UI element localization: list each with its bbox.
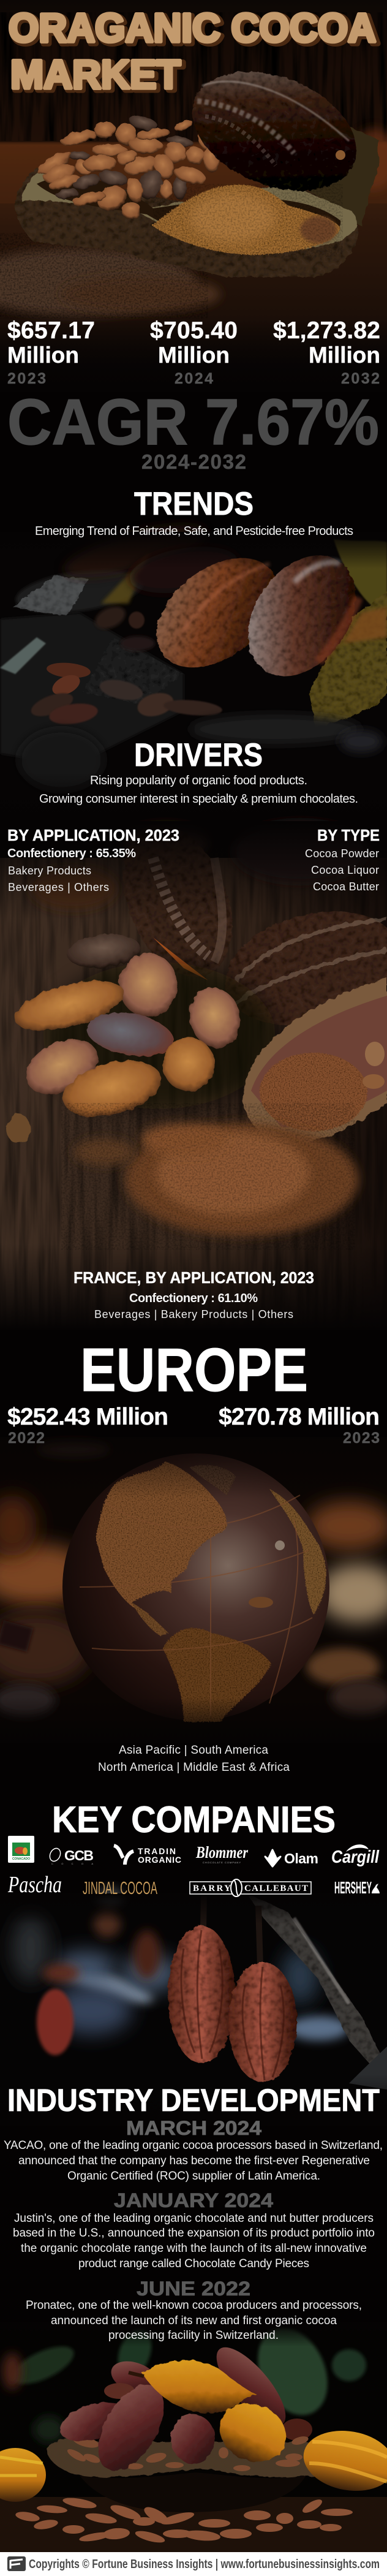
globe grid lines (80, 1495, 312, 1716)
text: other regions: Asia Pacific | South America (119, 1744, 268, 1757)
stat: Europe 2022: $252.43 Million (7, 1404, 168, 1430)
logo: Barry Callebaut: CALLEBAUT (244, 1884, 308, 1893)
stat: 2023 market size: $657.17 (7, 317, 95, 344)
cacao pod (175, 49, 374, 213)
heading: key companies: KEY COMPANIES (52, 1799, 336, 1840)
development: January 2024: the organic chocolate range with the launch of its all-new innovative (21, 2242, 367, 2255)
development: June 2022: JUNE 2022 (137, 2278, 250, 2300)
segmentation: by type: BY TYPE (317, 826, 380, 844)
logo: Barry Callebaut (190, 1879, 311, 1896)
text: trends description: Emerging Trend of Fairtrade, Safe, and Pesticide-free Products (35, 525, 353, 538)
development: March 2024: Organic Certified (ROC) supplier of Latin America. (67, 2170, 320, 2183)
logo: Jindal Cocoa: JINDAL COCOA (83, 1879, 157, 1898)
text: drivers description: Growing consumer interest in specialty & premium chocolates. (39, 792, 358, 806)
development: June 2022: announced the launch of its new and first organic cocoa (51, 2314, 337, 2327)
development: June 2022 (26, 2278, 362, 2342)
title: MARKET (10, 51, 181, 97)
stat: Europe 2022 (7, 1404, 168, 1447)
heading: Europe: EUROPE (80, 1336, 308, 1404)
heading: drivers: DRIVERS (134, 737, 263, 773)
title: ORAGANIC COCOA (9, 5, 376, 50)
development: January 2024: JANUARY 2024 (114, 2189, 273, 2211)
red pods (168, 1926, 297, 2082)
development: January 2024 (13, 2189, 375, 2270)
logo row 1 (8, 1836, 380, 1867)
south america (163, 1628, 271, 1722)
pods (0, 2360, 387, 2502)
image: cocoa pods on dark wood with leaves (0, 515, 387, 827)
footer (0, 2552, 387, 2576)
blurred background beans (31, 821, 367, 909)
image: beans, pods and cocoa powder on rustic table (0, 808, 387, 1330)
stat: 2023 market size (7, 317, 95, 387)
segmentation: France by application: Confectionery : 61.10% (129, 1292, 258, 1305)
segmentation: by application 2023 (7, 826, 179, 893)
stat: 2024 market size: $705.40 (150, 317, 238, 344)
greenland (190, 1465, 236, 1495)
shadows under beans (43, 962, 276, 1109)
title: MARKET (12, 53, 184, 99)
segmentation: by type: Cocoa Butter (313, 881, 379, 893)
image: cocoa pods in bowl with beans (0, 2316, 387, 2552)
segmentation: by application 2023: Confectionery : 65.35% (7, 847, 136, 860)
stat: 2024 market size (150, 317, 238, 387)
segmentation: France by application: Beverages | Bakery Products | Others (94, 1308, 293, 1320)
segmentation: by application 2023: Beverages | Others (8, 881, 109, 893)
logo: Conacado (8, 1836, 34, 1863)
logo: GCB Cocoa (48, 1847, 94, 1865)
segmentation: by type: Cocoa Powder (305, 847, 379, 860)
stat: Europe 2023 (219, 1404, 380, 1447)
stat: 2032 market size (273, 317, 380, 387)
image: cocoa pods hanging from tree (0, 1888, 387, 2126)
stat: 2023 market size: 2023 (7, 370, 46, 387)
logo: Olam (265, 1850, 318, 1866)
maroon pods behind (104, 2337, 312, 2441)
development: January 2024: Justin's, one of the leading organic chocolate and nut butter producers (14, 2212, 374, 2225)
beans in bowl (66, 2434, 309, 2471)
title: ORAGANIC COCOA (10, 7, 379, 52)
right pod (212, 893, 387, 1044)
loose beans (6, 931, 247, 1143)
segmentation: by type (305, 826, 380, 893)
development: March 2024: YACAO, one of the leading organic cocoa processors based in Switzerland, (4, 2139, 383, 2152)
text: other regions: North America | Middle East & Africa (98, 1761, 290, 1774)
text: drivers description (39, 774, 358, 806)
development: June 2022: Pronatec, one of the well-known cocoa producers and processors, (26, 2299, 362, 2312)
cocoa shell with powder (243, 978, 387, 1145)
stat: Europe 2023: $270.78 Million (219, 1404, 380, 1430)
stat: 2032 market size: $1,273.82 (273, 317, 380, 344)
logo: Blommer: CHOCOLATE COMPANY (203, 1861, 241, 1864)
central america (132, 1602, 168, 1636)
CAGR figure: 2024-2032 (141, 450, 246, 473)
logo row 2 (7, 1872, 380, 1898)
stat: 2032 market size: Million (309, 343, 380, 368)
right pod (226, 535, 378, 697)
logo: Olam: Olam (284, 1851, 318, 1866)
bowl (47, 2439, 324, 2477)
development: March 2024 (4, 2117, 383, 2183)
text: drivers description: Rising popularity of organic food products. (90, 774, 307, 787)
stat: 2024 market size: 2024 (175, 370, 213, 387)
segmentation: by application 2023: BY APPLICATION, 2023 (7, 826, 179, 844)
segmentation: by type: Cocoa Liquor (311, 864, 379, 876)
logo: Pascha: Pascha (7, 1872, 62, 1898)
africa edge (269, 1489, 326, 1615)
segmentation: France by application: FRANCE, BY APPLICATION, 2023 (73, 1268, 314, 1287)
scattered beans on table (15, 2496, 353, 2545)
left pod (136, 536, 299, 690)
branch (247, 1893, 387, 2083)
logo: Tradin Organic: ORGANIC (138, 1855, 181, 1865)
upper pod (102, 808, 253, 993)
stat: 2024 market size: Million (158, 343, 230, 368)
logo: Blommer: Blommer (195, 1843, 248, 1862)
stat: 2023 market size: Million (7, 343, 79, 368)
stat: 2032 market size: 2032 (341, 370, 380, 387)
logo: Barry Callebaut: BARRY (193, 1884, 231, 1893)
development: March 2024: announced that the company has become the first-ever Regenerative (18, 2154, 370, 2167)
segmentation: France by application (73, 1268, 314, 1320)
logo: Tradin Organic: TRADIN (138, 1846, 176, 1856)
image: cocoa pod, beans and powder in wooden bowl (0, 0, 387, 392)
text: other regions (98, 1744, 290, 1774)
development: January 2024: product range called Chocolate Candy Pieces (78, 2257, 309, 2270)
logo: GCB Cocoa: COCOA (51, 1862, 93, 1865)
stat: Europe 2022: 2022 (8, 1430, 45, 1447)
development: January 2024: based in the U.S., announced the expansion of its product portfolio into (13, 2227, 375, 2240)
north america (96, 1461, 227, 1615)
stat: Europe 2023: 2023 (343, 1430, 380, 1447)
logo: GCB Cocoa: GCB (64, 1847, 94, 1863)
development: June 2022: processing facility in Switzerland. (108, 2329, 279, 2342)
table (0, 2497, 387, 2552)
image: chocolate globe (0, 1437, 387, 1743)
logo: Tradin Organic (114, 1846, 181, 1865)
globe sphere (62, 1453, 329, 1721)
development: March 2024: MARCH 2024 (126, 2117, 261, 2139)
cocoa powder pile (61, 1103, 358, 1250)
icon: Fortune Business Insights logo (7, 2556, 26, 2571)
segmentation: by application 2023: Bakery Products (8, 865, 91, 877)
logo: Cargill: Cargill (331, 1847, 380, 1867)
title (9, 5, 379, 99)
pod stems (203, 1893, 260, 1967)
heading: trends: TRENDS (134, 486, 254, 522)
logo: Conacado: CONACADO (12, 1857, 30, 1861)
blurred red pod (37, 1989, 73, 2055)
